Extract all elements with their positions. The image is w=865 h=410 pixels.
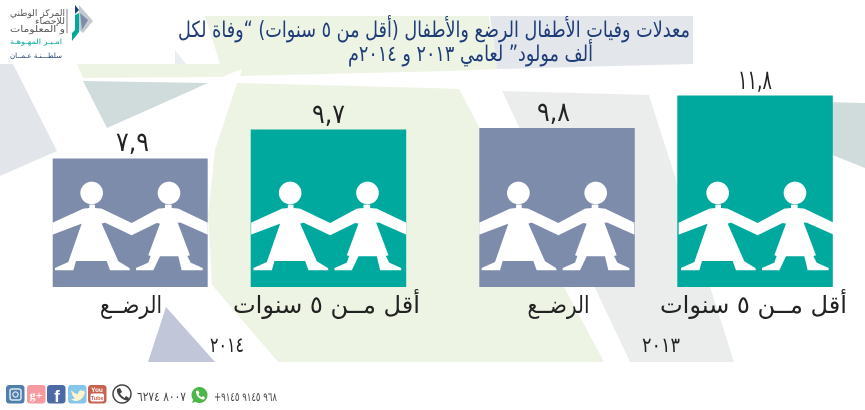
bar — [479, 128, 635, 287]
label: الرضــع — [528, 291, 590, 319]
logo text: للإحصاء — [35, 17, 65, 27]
logo text: امـيـر المهـوهـة — [10, 38, 62, 46]
icon: instagram — [6, 385, 24, 404]
logo text: و المعلومات — [10, 25, 65, 35]
logo icon — [72, 5, 93, 41]
label: أقل مــن ٥ سنوات — [233, 289, 420, 319]
panel: 2013 infants — [479, 97, 635, 319]
logo text: المركز الوطني — [10, 9, 65, 19]
icon: twitter — [68, 385, 86, 404]
icon: youtube: You — [91, 387, 103, 394]
bar — [677, 96, 833, 287]
phone number: ٨٠٠٧ ٦٢٧٤ — [137, 390, 186, 405]
year 2014: ٢٠١٤ — [210, 333, 244, 357]
logo text — [10, 9, 67, 60]
footer: social and contact — [6, 385, 277, 406]
icon: youtube: Tube — [91, 396, 104, 402]
icon: children — [479, 182, 634, 270]
icon: youtube — [88, 385, 106, 404]
title: معدلات وفيات الأطفال الرضع والأطفال (أقل من ٥ سنوات) “وفاة لكل — [178, 15, 690, 43]
icon: facebook: f — [54, 387, 60, 406]
label: الرضــع — [100, 291, 162, 319]
bar — [53, 158, 208, 287]
value: ٧,٩ — [116, 127, 149, 158]
logo text: سلطـــنـة عـمــان — [10, 52, 62, 60]
panel: 2013 under five — [660, 65, 847, 319]
year 2013: ٢٠١٣ — [642, 333, 680, 357]
icon: children — [679, 182, 834, 270]
icon: children — [251, 182, 406, 270]
title: ألف مولود” لعامي ٢٠١٣ و ٢٠١٤م — [348, 39, 593, 67]
icon: whatsapp — [192, 387, 208, 403]
icon: google plus — [27, 385, 46, 404]
icon: google plus: g+ — [30, 388, 43, 402]
value: ١١,٨ — [738, 65, 772, 96]
panel: 2014 infants — [53, 127, 208, 319]
whatsapp number: +٩٦٨ ٩١٤٥ ٩١٤٥ — [214, 390, 277, 404]
title — [178, 15, 690, 67]
logo — [10, 5, 93, 60]
icon: facebook — [47, 385, 66, 406]
icon: phone — [113, 385, 131, 403]
icon: children — [53, 182, 208, 270]
bar — [251, 130, 406, 287]
panel: 2014 under five — [233, 99, 420, 319]
value: ٩,٨ — [537, 97, 570, 128]
label: أقل مــن ٥ سنوات — [660, 289, 847, 319]
value: ٩,٧ — [312, 99, 345, 130]
